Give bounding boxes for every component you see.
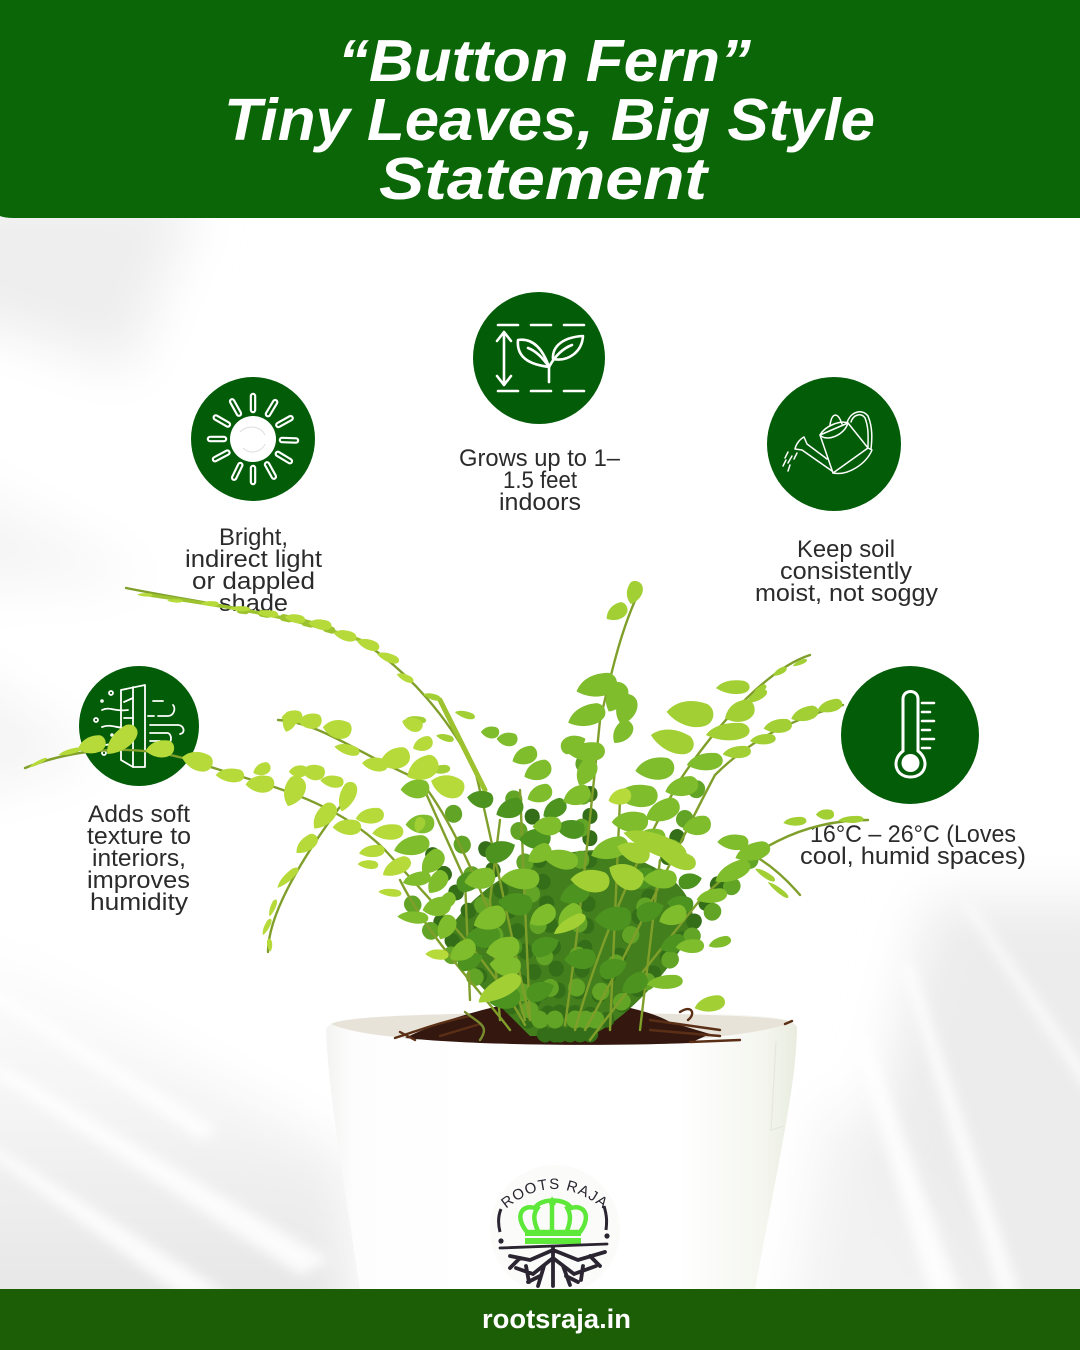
text: watering: Keep soil (797, 536, 895, 563)
text: height (459, 445, 621, 516)
text: watering: moist, not soggy (755, 580, 938, 607)
pot (326, 1014, 797, 1289)
text: light: Bright, (219, 524, 288, 551)
text: air and humidity: Adds soft (88, 801, 190, 828)
roots at soil line (395, 1009, 792, 1042)
stems (25, 588, 868, 1040)
text: height: indoors (499, 489, 581, 516)
text: light: indirect light (185, 546, 322, 573)
text: air and humidity: interiors, (92, 845, 186, 872)
dark leaves (433, 775, 702, 1009)
feature: height (459, 292, 621, 516)
text: temperature (800, 821, 1026, 870)
text: height: Grows up to 1– (459, 445, 621, 472)
plant: button fern (25, 579, 868, 1045)
text: air and humidity: texture to (87, 823, 191, 850)
text: light: or dappled (192, 568, 315, 595)
feature: temperature (800, 666, 1026, 870)
pale yellow-green frond leaves (28, 592, 632, 961)
foliage filler: dark (430, 790, 720, 1035)
icon: thermometer (841, 666, 979, 804)
feature: light (185, 377, 322, 617)
icon: air wall (79, 666, 199, 786)
text: air and humidity: humidity (90, 889, 188, 916)
logo crown (520, 1196, 586, 1244)
footer bar (0, 1289, 1080, 1350)
icon: sun (191, 377, 315, 501)
mid green leaves (393, 672, 772, 989)
icon: watering can (767, 377, 901, 511)
footer website text: rootsraja.in (482, 1304, 631, 1334)
feature: air and humidity (79, 666, 199, 916)
text: temperature: 16°C – 26°C (Loves (810, 821, 1016, 848)
foliage base mass (445, 850, 693, 1036)
logo brand text: ROOTS RAJA (500, 1178, 606, 1208)
feature: watering (755, 377, 938, 607)
text: air and humidity (87, 801, 191, 916)
pot body (326, 1012, 797, 1289)
text: light (185, 524, 322, 617)
title: Statement (379, 146, 710, 212)
icon: sprout with height arrow (473, 292, 605, 424)
header banner (0, 0, 1080, 218)
title: Tiny Leaves, Big Style (224, 87, 875, 153)
bright leaves (405, 579, 864, 1013)
text: watering (755, 536, 938, 607)
title (224, 28, 875, 212)
thick frond band: upper left (150, 595, 485, 790)
pot sticker seam (771, 1042, 784, 1130)
title: “Button Fern” (338, 28, 752, 94)
text: air and humidity: improves (87, 867, 190, 894)
logo sticker (497, 1178, 610, 1288)
text: temperature: cool, humid spaces) (800, 843, 1026, 870)
soil and root mass (405, 1000, 710, 1045)
text: watering: consistently (780, 558, 912, 585)
pot inner rim (331, 1013, 792, 1044)
text: light: shade (219, 590, 288, 617)
logo ring segments (499, 1206, 607, 1232)
logo roots (500, 1244, 607, 1286)
foliage filler: mid green (410, 740, 750, 1020)
text: height: 1.5 feet (503, 467, 577, 494)
